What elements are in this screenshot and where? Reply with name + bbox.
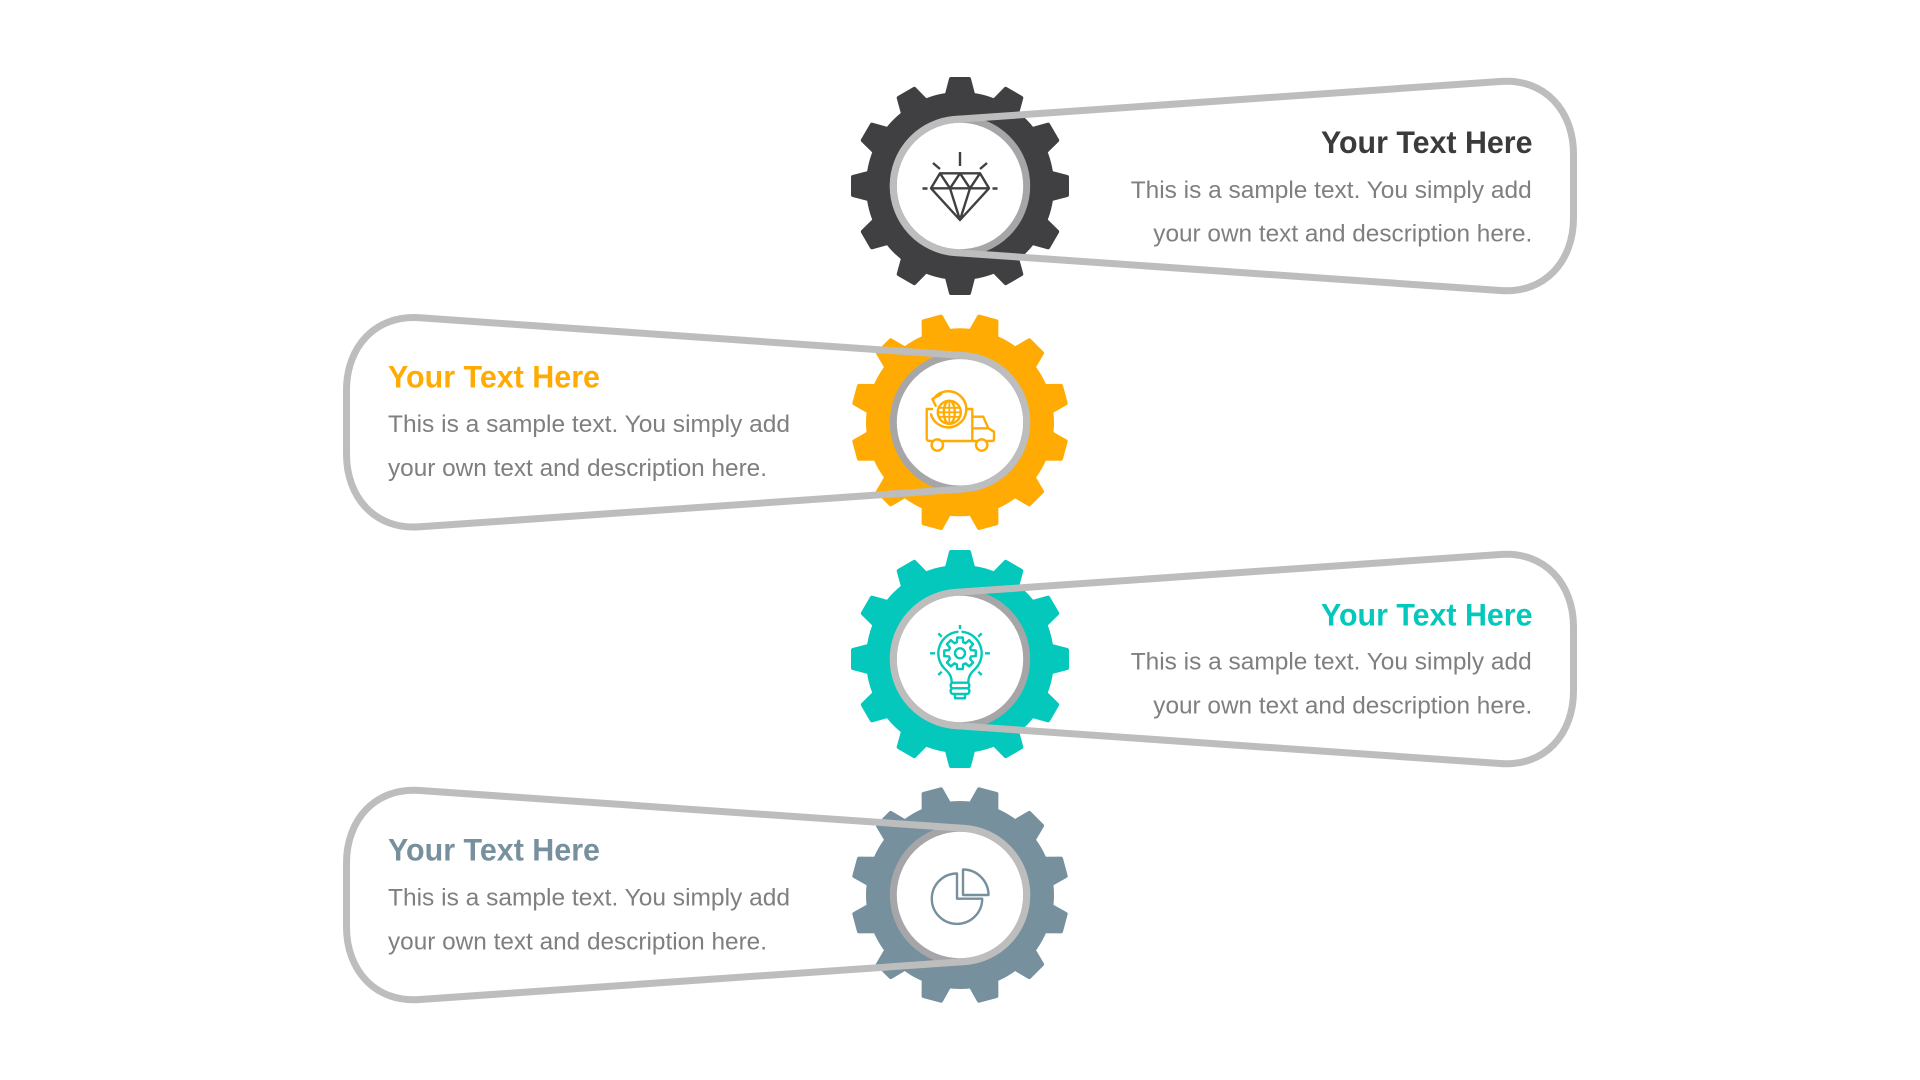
icon: lightbulb with gear bbox=[930, 625, 990, 698]
description line 2: your own text and description here. bbox=[388, 928, 767, 955]
belt outline bbox=[346, 790, 1027, 1000]
panel: step 2 (orange, left) bbox=[346, 289, 1093, 556]
inner ring bbox=[893, 592, 1027, 726]
belt outline bbox=[893, 554, 1574, 764]
heading: Your Text Here bbox=[388, 831, 600, 867]
description line 2: your own text and description here. bbox=[1153, 221, 1532, 248]
icon: pie chart bbox=[932, 870, 988, 924]
inner ring bbox=[893, 356, 1027, 489]
description line 1: This is a sample text. You simply add bbox=[1131, 649, 1532, 676]
panel: step 4 (slate, left) bbox=[346, 762, 1093, 1028]
panel: step 3 (teal, right) bbox=[851, 550, 1574, 768]
description line 1: This is a sample text. You simply add bbox=[388, 884, 790, 911]
description line 2: your own text and description here. bbox=[388, 455, 767, 482]
description line 2: your own text and description here. bbox=[1153, 693, 1532, 720]
belt outline bbox=[893, 81, 1574, 291]
icon: diamond bbox=[922, 152, 998, 220]
gear: dark bbox=[851, 77, 1069, 295]
belt outline bbox=[346, 318, 1027, 527]
icon: delivery truck with globe bbox=[927, 391, 994, 451]
gear: teal bbox=[851, 550, 1069, 768]
inner ring bbox=[893, 828, 1027, 962]
panel: step 1 (dark, right) bbox=[851, 77, 1574, 295]
gear: slate bbox=[827, 762, 1093, 1028]
gear: orange bbox=[827, 289, 1093, 556]
description line 1: This is a sample text. You simply add bbox=[388, 411, 790, 438]
heading: Your Text Here bbox=[1321, 124, 1532, 160]
heading: Your Text Here bbox=[1321, 596, 1532, 632]
inner ring bbox=[893, 119, 1027, 253]
heading: Your Text Here bbox=[388, 359, 600, 395]
description line 1: This is a sample text. You simply add bbox=[1131, 177, 1532, 204]
